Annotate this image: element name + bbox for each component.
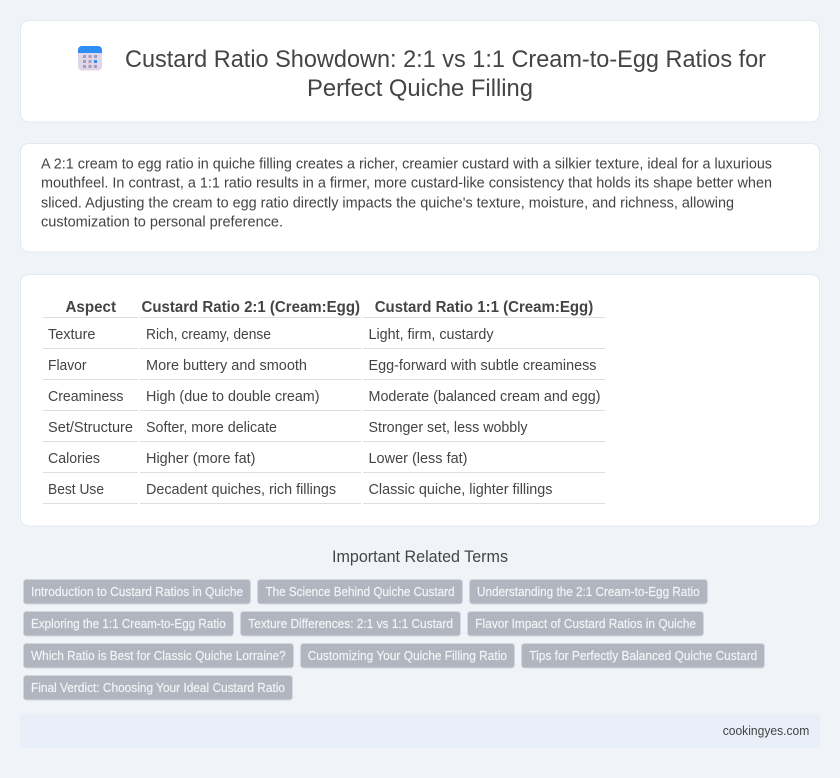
table header: Custard Ratio 2:1 (Cream:Egg) [142,299,360,316]
table header: Custard Ratio 1:1 (Cream:Egg) [375,299,593,316]
tags: related terms: Understanding the 2:1 Cream-to-Egg Ratio [477,584,700,599]
row: best use: Classic quiche, lighter fillings [368,481,552,498]
footer [20,714,820,748]
row: flavor [48,357,596,374]
panel: summary paragraph: sliced. Adjusting the cream to egg ratio directly impacts the quiche's texture, moisture, and richness, allowing [41,194,734,211]
row: calories: Higher (more fat) [146,450,256,467]
panel: summary paragraph: A 2:1 cream to egg ratio in quiche filling creates a richer, creamier custard with a silkier texture, ideal for a luxurious [41,155,772,172]
tags: related terms [24,580,764,700]
row: texture: Light, firm, custardy [368,326,494,343]
panel: comparison table [20,274,820,526]
row: set/structure [48,419,528,436]
title [125,46,766,102]
icon: calendar [78,46,102,70]
tags: related terms: Tips for Perfectly Balanced Quiche Custard [529,648,757,663]
tags: related terms: Which Ratio is Best for Classic Quiche Lorraine? [31,648,286,663]
tags: related terms: Introduction to Custard Ratios in Quiche [31,584,243,599]
title: Perfect Quiche Filling [307,75,533,102]
panel: summary paragraph: mouthfeel. In contrast, a 1:1 ratio results in a firmer, more custard-like consistency that holds its shape better when [41,174,772,191]
row: texture: Texture [48,326,96,343]
tags: related terms: Customizing Your Quiche Filling Ratio [308,648,507,663]
tags: related terms: Exploring the 1:1 Cream-to-Egg Ratio [31,616,226,631]
table header: Aspect [66,299,117,316]
table header [66,299,593,316]
row: creaminess: High (due to double cream) [146,388,320,405]
row: set/structure: Softer, more delicate [146,419,277,436]
row: calories: Lower (less fat) [368,450,468,467]
tags: related terms: Final Verdict: Choosing Your Ideal Custard Ratio [31,680,285,695]
row: texture [48,326,494,343]
row: creaminess: Creaminess [48,388,124,405]
row: flavor: Flavor [48,357,86,374]
tags: related terms: Texture Differences: 2:1 vs 1:1 Custard [248,616,453,631]
panel: title card [20,20,820,122]
row: flavor: More buttery and smooth [146,357,307,374]
row: best use [48,481,552,498]
row: best use: Best Use [48,481,104,498]
panel: summary paragraph [20,144,820,252]
row: calories: Calories [48,450,100,467]
title: Custard Ratio Showdown: 2:1 vs 1:1 Cream-to-Egg Ratios for [125,46,766,73]
row: texture: Rich, creamy, dense [146,326,271,343]
footer: cookingyes.com [723,723,809,738]
row: calories [48,450,468,467]
panel: summary paragraph: customization to personal preference. [41,213,283,230]
row: creaminess: Moderate (balanced cream and egg) [368,388,600,405]
row: creaminess [48,388,600,405]
row: set/structure: Set/Structure [48,419,133,436]
row: flavor: Egg-forward with subtle creaminess [368,357,596,374]
heading: related terms: Important Related Terms [332,548,508,566]
row: best use: Decadent quiches, rich fillings [146,481,336,498]
row: set/structure: Stronger set, less wobbly [368,419,528,436]
tags: related terms: Flavor Impact of Custard Ratios in Quiche [475,616,696,631]
tags: related terms: The Science Behind Quiche Custard [266,584,454,599]
